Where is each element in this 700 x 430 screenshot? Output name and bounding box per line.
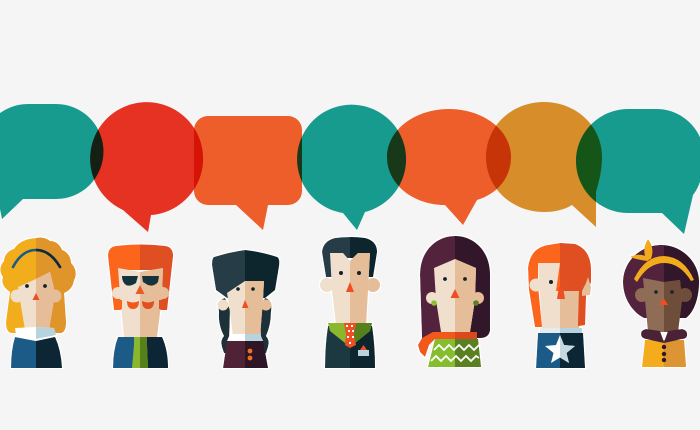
hair [623, 245, 699, 318]
collar [15, 327, 56, 339]
dress [223, 341, 268, 368]
ears [530, 277, 591, 296]
bubble: red round [90, 102, 203, 232]
hair [420, 236, 490, 338]
bubble: teal left [0, 104, 103, 219]
face [118, 268, 163, 337]
ears [320, 278, 380, 292]
ears [635, 288, 692, 302]
pocket square [358, 345, 369, 356]
jacket [11, 337, 62, 368]
ears [10, 290, 62, 302]
speech bubbles row [0, 102, 700, 234]
dress [642, 340, 686, 367]
bubble: orange square [194, 116, 302, 230]
hair [322, 237, 377, 277]
neck and face [538, 263, 582, 330]
character: red-haired man with star shirt [528, 243, 591, 368]
face [643, 278, 682, 332]
collar [328, 323, 372, 347]
nose [557, 287, 565, 299]
jacket [113, 337, 168, 368]
ears [426, 292, 484, 304]
character: man with sunglasses [108, 244, 173, 368]
star [545, 335, 575, 363]
character: woman with long dark hair and scarf [418, 236, 490, 367]
headband [13, 250, 60, 267]
nose [136, 285, 144, 294]
sideburns [114, 300, 167, 309]
face [434, 259, 476, 332]
ears [112, 287, 169, 299]
earrings [431, 300, 479, 306]
face [18, 272, 54, 330]
face [330, 253, 370, 325]
bubble: amber round [486, 102, 602, 227]
eyes and nose [339, 271, 361, 292]
headband [630, 239, 694, 282]
eyes and nose [654, 290, 674, 305]
shirt [536, 333, 585, 368]
collar [641, 329, 687, 343]
eyes and nose [443, 277, 467, 298]
zigzag pattern [431, 345, 479, 361]
character: woman with dark hair and braids [212, 250, 279, 368]
buttons [248, 349, 252, 360]
sunglasses [122, 276, 159, 286]
moustache [127, 301, 154, 309]
sweater [428, 339, 481, 367]
face [227, 281, 264, 337]
hair [0, 238, 76, 333]
eye [549, 280, 553, 284]
scarf [418, 332, 477, 357]
ears [218, 300, 272, 310]
character: woman with headband [623, 239, 699, 367]
bubble: teal right [576, 109, 700, 234]
character: man in suit [320, 237, 380, 368]
tie [344, 323, 356, 348]
collar [227, 334, 263, 341]
character: blonde woman [0, 238, 76, 368]
bubble: orange oval [387, 109, 511, 225]
collar [540, 328, 582, 333]
jacket [325, 326, 375, 368]
braids [219, 298, 271, 353]
hair [212, 250, 279, 298]
eyes and nose [25, 284, 47, 300]
tie [132, 337, 148, 368]
bubble: teal round [297, 105, 406, 230]
hair [528, 243, 591, 327]
buttons [662, 345, 666, 362]
eyes and nose [236, 287, 255, 308]
hair [108, 244, 173, 310]
